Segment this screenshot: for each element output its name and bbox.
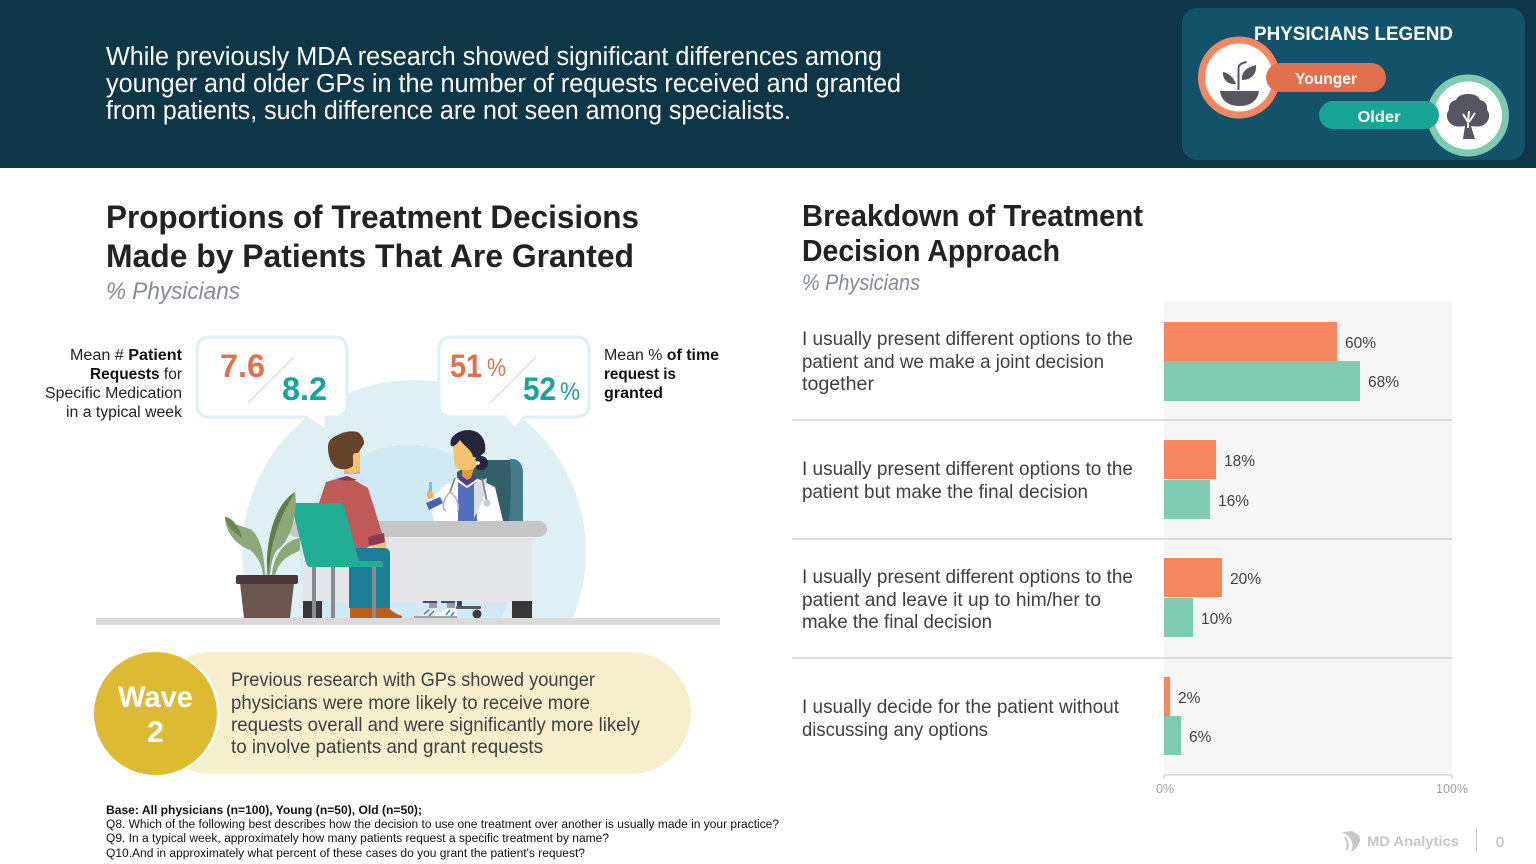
- row: decide without discussing: discussing any options: [802, 719, 988, 741]
- row: joint decision: patient and we make a joint decision: [802, 351, 1104, 373]
- callout: time request granted: 51: [450, 348, 482, 384]
- header statement: younger and older GPs in the number of requests received and granted: [106, 70, 901, 98]
- row: patient makes final decision: patient and leave it up to him/her to: [802, 589, 1101, 611]
- label: mean patient requests: [45, 347, 182, 421]
- row: patient makes final decision: I usually present different options to the: [802, 566, 1133, 588]
- label: mean percent granted: granted: [604, 385, 663, 402]
- potted plant: [225, 492, 300, 618]
- doctor's feet and chair base: [414, 601, 482, 618]
- patient's chair: [292, 503, 383, 619]
- row: joint decision: together: [802, 373, 875, 395]
- heading: breakdown of treatment decision approach: % Physicians: [802, 270, 920, 295]
- chart axis: 0%: [1156, 782, 1174, 796]
- row: joint decision: I usually present different options to the: [802, 328, 1133, 350]
- row: patient makes final decision: 10%: [1201, 611, 1232, 628]
- wave 2 text: physicians were more likely to receive more: [231, 692, 590, 714]
- wave 2 badge: 2: [147, 716, 164, 749]
- callout: time request granted: [439, 337, 589, 429]
- wave 2 text: Previous research with GPs showed younger: [231, 669, 595, 691]
- footnotes: Q9. In a typical week, approximately how many patients request a specific treatment by name?: [106, 833, 609, 845]
- row: patient makes final decision: 20%: [1230, 571, 1261, 588]
- row: joint decision: 60%: [1345, 335, 1376, 352]
- row: physician makes final decision: [802, 440, 1255, 519]
- header statement: While previously MDA research showed significant differences among: [106, 43, 882, 71]
- doctor: [426, 430, 503, 521]
- wave 2 text: to involve patients and grant requests: [231, 736, 543, 758]
- page number: 0: [1496, 834, 1504, 851]
- callout: time request granted: 52: [523, 371, 556, 407]
- icon: older tree: [1427, 74, 1509, 156]
- bar chart: treatment decision approach: [792, 302, 1468, 796]
- row: joint decision: [802, 322, 1399, 401]
- panel: wave 2 callout: [94, 652, 691, 776]
- wave 2 text: [231, 669, 640, 758]
- heading: proportions of treatment decisions: Proportions of Treatment Decisions: [106, 199, 639, 235]
- legend pill: younger: Younger: [1295, 71, 1357, 88]
- callout: patient requests: 7.6: [220, 348, 265, 384]
- header statement: from patients, such difference are not seen among specialists.: [106, 97, 791, 125]
- icon: younger sprout: [1198, 36, 1280, 118]
- footnotes: Base: All physicians (n=100), Young (n=50), Old (n=50);: [106, 805, 422, 817]
- wave 2 text: requests overall and were significantly more likely: [231, 714, 640, 736]
- row: joint decision: 68%: [1368, 374, 1399, 391]
- heading: proportions of treatment decisions: % Physicians: [106, 278, 240, 305]
- heading: proportions of treatment decisions: Made by Patients That Are Granted: [106, 238, 634, 274]
- callout: patient requests: 8.2: [282, 371, 327, 407]
- legend pill: younger: [1266, 63, 1386, 92]
- patient: [319, 431, 402, 619]
- row: decide without discussing: 2%: [1178, 690, 1201, 707]
- footnotes: [106, 805, 779, 860]
- heading: breakdown of treatment decision approach: Breakdown of Treatment: [802, 198, 1143, 233]
- label: mean percent granted: request is: [604, 366, 676, 383]
- row: decide without discussing: 6%: [1189, 729, 1212, 746]
- row: decide without discussing: I usually decide for the patient without: [802, 696, 1120, 718]
- logo: md analytics: [1342, 831, 1459, 852]
- legend title: PHYSICIANS LEGEND: [1254, 24, 1453, 45]
- wave 2 badge: Wave: [118, 681, 193, 714]
- header band: [0, 0, 1536, 168]
- row: physician makes final decision: 18%: [1224, 453, 1255, 470]
- header statement: [106, 43, 901, 125]
- illustration: doctor and patient consultation: [225, 380, 586, 618]
- heading: proportions of treatment decisions: [106, 199, 639, 305]
- wave 2 badge: [94, 652, 217, 775]
- row: physician makes final decision: 16%: [1218, 493, 1249, 510]
- heading: breakdown of treatment decision approach: Decision Approach: [802, 233, 1060, 268]
- row: decide without discussing: [802, 677, 1212, 755]
- label: mean patient requests: Requests for: [90, 366, 182, 383]
- chart axis: 100%: [1436, 782, 1468, 796]
- heading: breakdown of treatment decision approach: [802, 198, 1143, 295]
- chart axis: [1156, 775, 1468, 796]
- row: patient makes final decision: [802, 558, 1261, 637]
- footnotes: Q10.And in approximately what percent of these cases do you grant the patient's request?: [106, 848, 585, 860]
- row: patient makes final decision: make the final decision: [802, 611, 992, 633]
- label: mean patient requests: in a typical week: [66, 404, 182, 421]
- panel: physicians legend: [1182, 8, 1525, 160]
- floor line: [96, 618, 720, 625]
- logo: md analytics: MD Analytics: [1367, 834, 1459, 849]
- row: physician makes final decision: I usually present different options to the: [802, 458, 1133, 480]
- footnotes: Q8. Which of the following best describes how the decision to use one treatment over another is usually made in your practice?: [106, 819, 779, 831]
- legend pill: older: [1319, 101, 1439, 129]
- label: mean patient requests: Specific Medication: [45, 385, 182, 402]
- desk: [288, 521, 547, 619]
- label: mean percent granted: [604, 347, 719, 402]
- legend pill: older: Older: [1358, 109, 1400, 126]
- callout: time request granted: %: [560, 378, 580, 406]
- callout: time request granted: %: [487, 354, 506, 382]
- row: physician makes final decision: patient but make the final decision: [802, 481, 1088, 503]
- doctor's chair: [457, 460, 522, 521]
- callout: patient requests: [197, 337, 347, 430]
- label: mean percent granted: Mean % of time: [604, 347, 719, 364]
- label: mean patient requests: Mean # Patient: [70, 347, 182, 364]
